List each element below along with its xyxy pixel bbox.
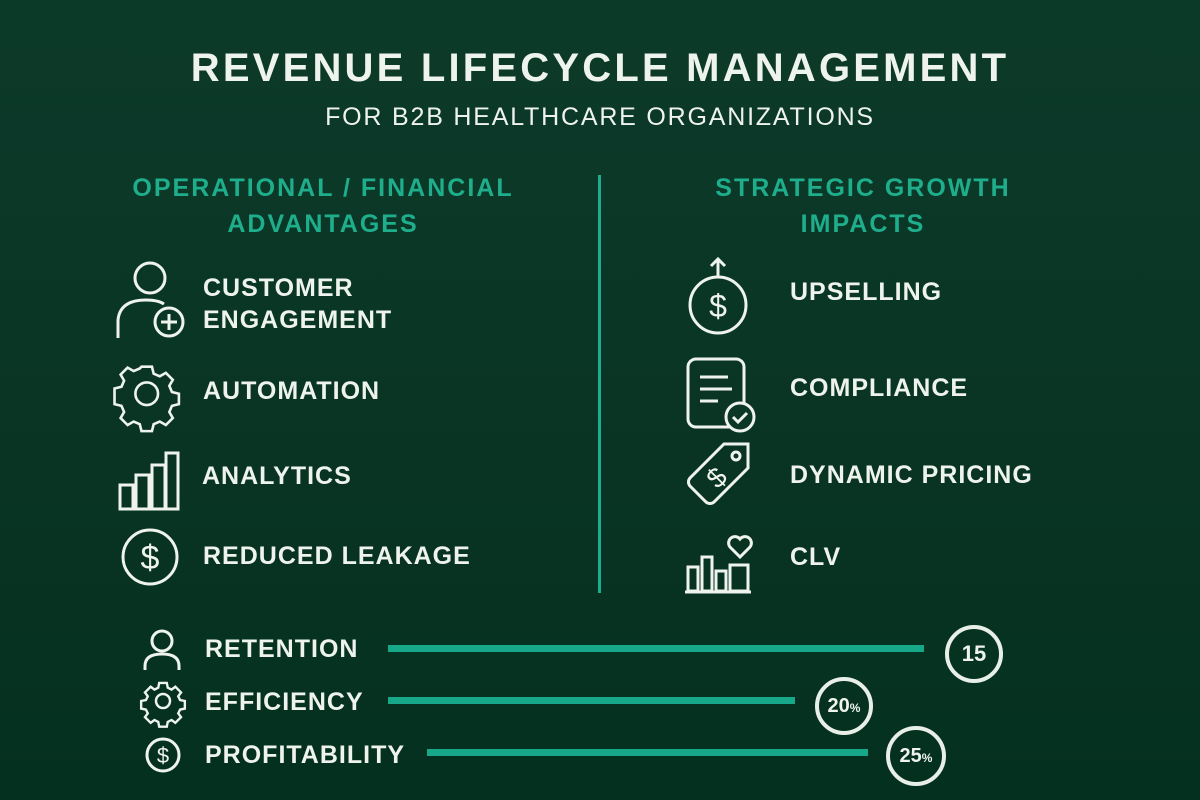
- text: analytics: ANALYTICS: [202, 462, 352, 490]
- row: retention: [144, 625, 1003, 683]
- icon: bar chart: [118, 452, 180, 510]
- text: compliance: COMPLIANCE: [790, 374, 968, 402]
- icon: dollar: $: [141, 539, 160, 577]
- row: efficiency: [140, 677, 873, 735]
- icon: dollar up: [688, 257, 748, 334]
- badge: 25%: [886, 726, 946, 786]
- label: PROFITABILITY: [205, 741, 405, 769]
- icon: price tag: [687, 442, 750, 505]
- icon: document check: [686, 358, 756, 432]
- icon: chart heart: [685, 535, 753, 594]
- bar: [427, 749, 868, 756]
- label: EFFICIENCY: [205, 688, 364, 716]
- subtitle: FOR B2B HEALTHCARE ORGANIZATIONS: [325, 103, 875, 131]
- icon: dollar: [122, 528, 178, 586]
- divider: [598, 175, 601, 593]
- bar: [388, 645, 924, 652]
- text: clv: CLV: [790, 543, 841, 571]
- badge: 15: 15: [962, 641, 986, 666]
- heading: operational: [132, 174, 514, 238]
- bar: [388, 697, 795, 704]
- panel: metrics: [140, 625, 1003, 786]
- badge: 25%: 25%: [900, 745, 932, 767]
- heading: strategic: [715, 174, 1011, 238]
- badge: 20%: [815, 677, 873, 735]
- row: profitability: [146, 726, 946, 786]
- text: customer engagement: ENGAGEMENT: [203, 306, 392, 334]
- text: upselling: UPSELLING: [790, 278, 942, 306]
- label: RETENTION: [205, 635, 358, 663]
- text: customer engagement: CUSTOMER: [203, 274, 354, 302]
- heading: operational: ADVANTAGES: [227, 210, 419, 238]
- icon: dollar: $: [157, 743, 169, 768]
- title: REVENUE LIFECYCLE MANAGEMENT: [191, 46, 1009, 90]
- icon: user plus: [116, 262, 184, 338]
- panel: left items: [113, 262, 471, 586]
- icon: gear: [113, 365, 180, 432]
- badge: 20%: 20%: [828, 695, 860, 717]
- icon: dollar up: $: [709, 288, 727, 324]
- text: reduced leakage: REDUCED LEAKAGE: [203, 542, 471, 570]
- heading: strategic: IMPACTS: [801, 210, 925, 238]
- badge: 15: [945, 625, 1003, 683]
- text: automation: AUTOMATION: [203, 377, 380, 405]
- icon: user: [144, 630, 180, 670]
- heading: operational: OPERATIONAL / FINANCIAL: [132, 174, 514, 202]
- text: dynamic pricing: DYNAMIC PRICING: [790, 461, 1033, 489]
- icon: price tag: $: [700, 461, 733, 494]
- icon: gear: [140, 682, 186, 728]
- text: customer engagement: [203, 274, 392, 334]
- panel: right items: [685, 257, 1033, 594]
- heading: strategic: STRATEGIC GROWTH: [715, 174, 1011, 202]
- icon: dollar: [146, 738, 180, 772]
